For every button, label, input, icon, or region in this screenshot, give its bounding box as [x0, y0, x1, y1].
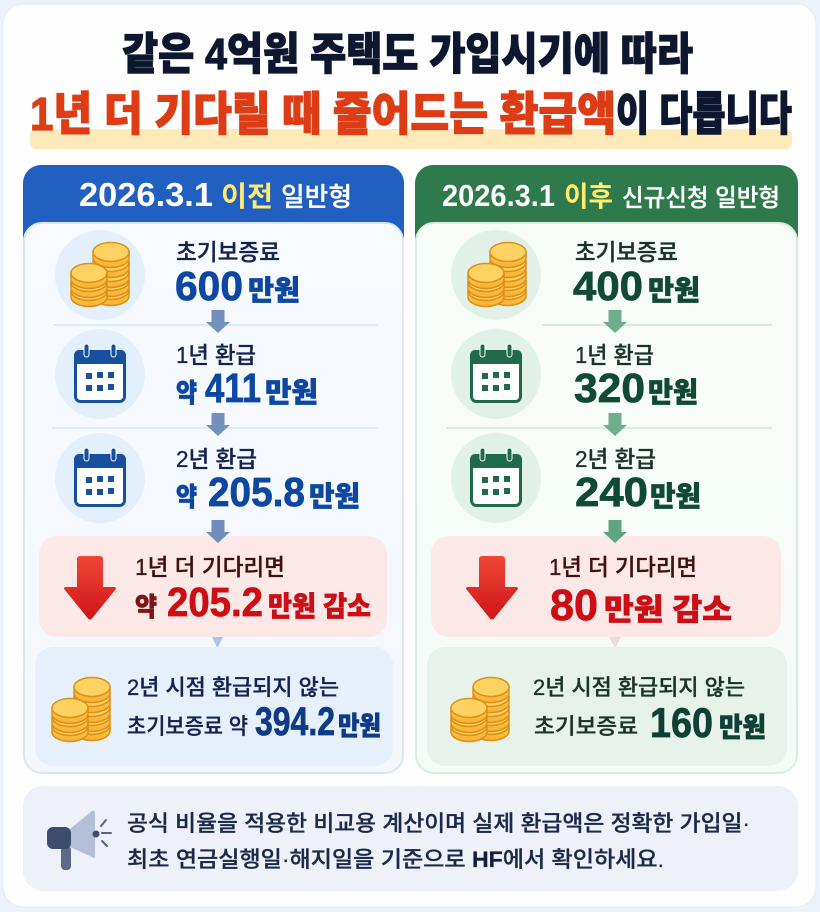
step: year 1 refund — [451, 329, 698, 419]
icon: calendar — [55, 433, 145, 523]
icon: calendar — [55, 329, 145, 419]
value: 205.8 — [208, 469, 305, 515]
callout: not refunded 394.2: 초기보증료 약 — [127, 714, 248, 739]
step: initial premium 600 — [55, 230, 300, 320]
panel header: after: 2026.3.1 — [442, 178, 555, 213]
panel header: after — [415, 165, 798, 255]
callout: decrease 205.2: 만원 감소 — [268, 591, 371, 622]
label: 1년 환급 — [575, 342, 654, 368]
panel body: before — [24, 223, 403, 773]
callout: not refunded 160 — [427, 647, 787, 766]
callout: decrease 80 — [431, 536, 781, 637]
value — [175, 263, 300, 309]
value: 만원 — [248, 275, 300, 306]
icon: red down arrow — [64, 556, 116, 619]
callout: decrease 80: 만원 감소 — [604, 594, 732, 627]
icon: coins — [55, 230, 145, 320]
panel: after 2026.3.1 — [415, 165, 798, 773]
connector triangle — [212, 637, 223, 648]
value — [574, 365, 698, 411]
title line 1: 같은 4억원 주택도 가입시기에 따라 — [122, 30, 693, 79]
label: 1년 환급 — [176, 342, 256, 368]
panel header: before — [23, 165, 404, 255]
panel header: before: 일반형 — [281, 182, 352, 212]
value: 만원 — [650, 481, 701, 512]
callout: not refunded 160: 초기보증료 — [534, 714, 638, 739]
callout: not refunded 160: 만원 — [719, 713, 766, 743]
value: 240 — [575, 469, 648, 515]
step: year 2 refund — [451, 433, 701, 523]
arrow — [206, 520, 230, 543]
value — [573, 263, 700, 309]
footer note: 최초 연금실행일·해지일을 기준으로 HF에서 확인하세요. — [127, 847, 664, 872]
arrow — [206, 310, 230, 333]
title — [30, 30, 792, 149]
value: 약 — [176, 482, 197, 512]
arrow — [206, 413, 230, 436]
callout: decrease 205.2: 205.2 — [167, 579, 263, 625]
callout text: 2년 시점 환급되지 않는 — [533, 675, 745, 700]
value: 만원 — [265, 377, 318, 408]
callout: not refunded 160: 160 — [650, 699, 713, 746]
value: 만원 — [309, 481, 360, 512]
value: 320 — [574, 365, 645, 411]
callout text: 2년 시점 환급되지 않는 — [127, 675, 339, 700]
connector triangle — [609, 637, 621, 648]
callout: decrease 205.2 — [39, 536, 387, 637]
panel header: after: 이후 — [564, 181, 613, 212]
callout text: 1년 더 기다리면 — [135, 554, 285, 580]
icon: calendar — [451, 433, 541, 523]
panel: before 2026.3.1 — [23, 165, 404, 773]
icon: megaphone — [47, 811, 111, 870]
icon: red down arrow — [466, 556, 518, 619]
label: 초기보증료 — [575, 239, 678, 265]
label: 2년 환급 — [176, 446, 257, 472]
label: 초기보증료 — [176, 239, 280, 265]
label: 2년 환급 — [575, 446, 656, 472]
callout: decrease 205.2: 약 — [135, 592, 157, 622]
value: 400 — [573, 263, 643, 309]
arrow — [603, 520, 627, 543]
step: year 2 refund — [55, 433, 360, 523]
icon: coins — [451, 678, 509, 742]
callout: not refunded 394.2: 만원 — [338, 711, 381, 741]
value: 약 — [176, 378, 197, 408]
panel header: before: 이전 — [221, 181, 273, 212]
note text: 공식 비율을 적용한 비교용 계산이며 실제 환급액은 정확한 가입일· — [127, 811, 750, 836]
panel body: after — [416, 223, 797, 773]
value — [176, 365, 318, 411]
value: 만원 — [648, 377, 698, 408]
icon: coins — [52, 678, 110, 742]
value: 411 — [205, 365, 261, 411]
callout: not refunded 394.2: 394.2 — [255, 700, 335, 744]
title highlight bar — [30, 129, 792, 149]
arrow — [603, 413, 627, 436]
panel header: after: 신규신청 일반형 — [622, 185, 780, 212]
callout: decrease 80: 80 — [550, 581, 598, 630]
footer note — [23, 786, 798, 891]
value — [575, 469, 701, 515]
step: year 1 refund — [55, 329, 318, 419]
callout: not refunded 394.2 — [35, 647, 393, 766]
panel header: before: 2026.3.1 — [79, 176, 213, 213]
value — [176, 469, 360, 515]
value: 만원 — [648, 275, 700, 306]
icon: calendar — [451, 329, 541, 419]
step: initial premium 400 — [451, 230, 700, 320]
callout text: 1년 더 기다리면 — [549, 554, 697, 580]
icon: coins — [451, 230, 541, 320]
arrow — [603, 310, 627, 333]
value: 600 — [175, 263, 243, 309]
title line 2 accent: 1년 더 기다릴 때 줄어드는 환급액 — [30, 88, 616, 140]
